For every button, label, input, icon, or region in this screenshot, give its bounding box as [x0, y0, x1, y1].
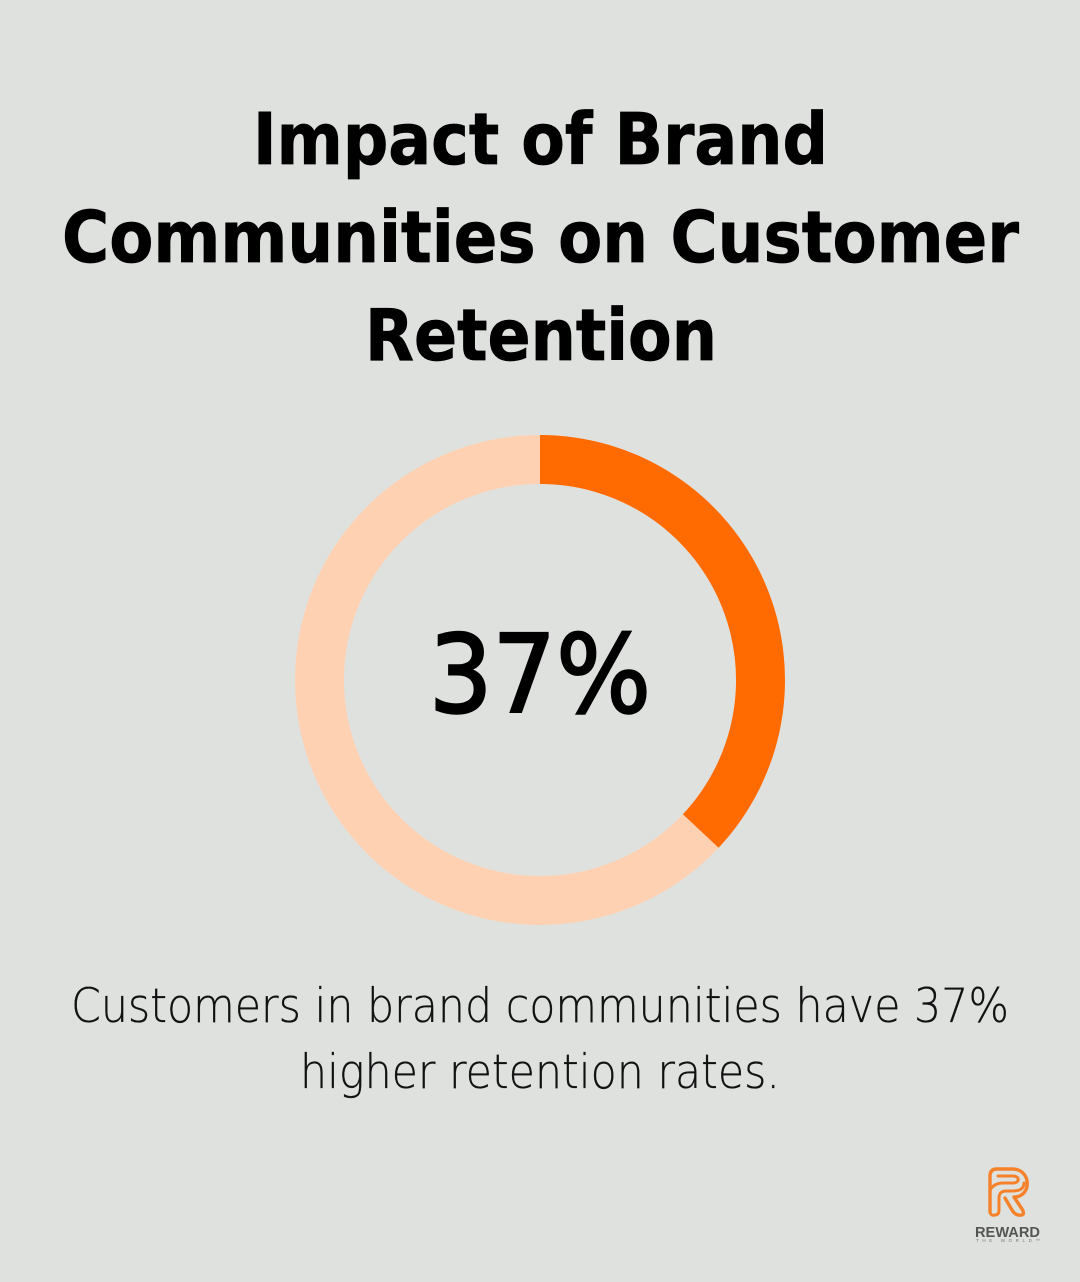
donut chart: 37%	[320, 435, 785, 900]
caption: Customers in brand communities have 37%	[71, 979, 1009, 1034]
title	[62, 98, 1019, 377]
title: Impact of Brand	[253, 98, 828, 181]
caption: higher retention rates.	[300, 1045, 780, 1100]
donut highlighted 37% segment	[540, 435, 785, 848]
donut remainder track	[320, 460, 760, 900]
logo tagline: THE WORLD™	[976, 1238, 1040, 1243]
logo wordmark: REWARD	[975, 1225, 1040, 1241]
title: Retention	[365, 294, 717, 377]
caption	[71, 979, 1009, 1100]
icon: stylized R	[990, 1169, 1027, 1215]
center value: 37%	[429, 613, 651, 738]
logo: Reward the World	[975, 1169, 1040, 1243]
